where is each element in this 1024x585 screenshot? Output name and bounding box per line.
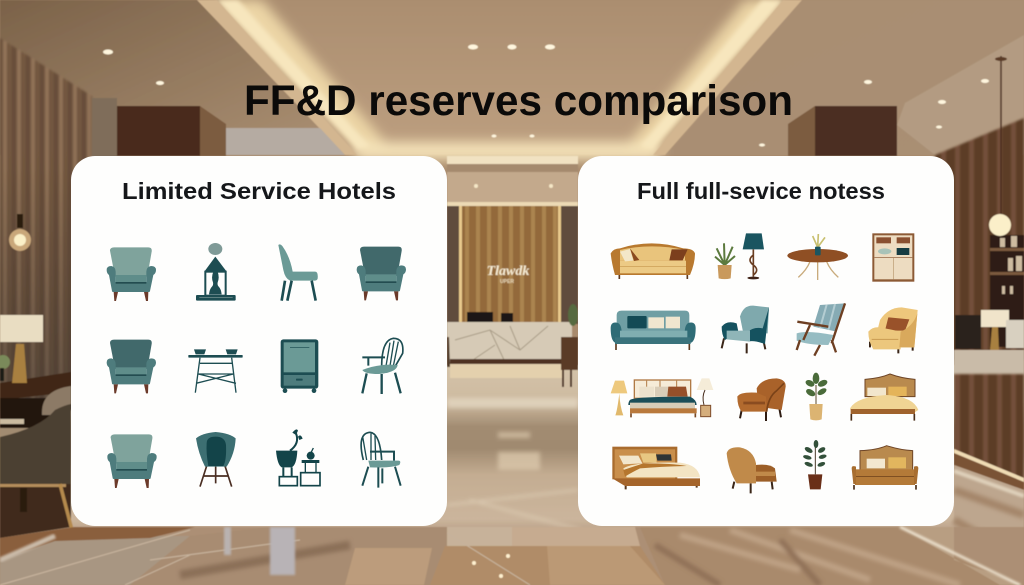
icon: armchair light	[107, 247, 156, 301]
reception back wall	[447, 206, 578, 324]
icon: wood frame chair	[797, 303, 845, 356]
panel: limited service hotels	[71, 156, 447, 526]
center ceiling	[213, 0, 785, 155]
icon: scoop chair	[196, 432, 236, 487]
center upper ceiling strip	[447, 156, 578, 164]
icon: potted plant tan	[805, 373, 828, 420]
icon: brown armchair	[737, 378, 786, 421]
icon: teal sofa	[611, 311, 696, 350]
right pendant	[1000, 56, 1002, 215]
icon: cabinet	[872, 233, 914, 282]
left armchair	[42, 386, 71, 415]
icon: tufted settee	[852, 446, 918, 490]
icon: bed with teal throw	[628, 380, 697, 417]
right slat wall	[935, 118, 1024, 360]
icon: tan armchair	[727, 447, 777, 493]
floor streaks	[447, 398, 580, 530]
icon: potted plant dark	[803, 440, 827, 489]
floor	[0, 365, 1024, 585]
reception desk	[447, 322, 572, 362]
icon: lantern lamp	[196, 243, 236, 301]
ceiling downlights	[103, 44, 989, 146]
icon: windsor chair right	[362, 338, 403, 394]
icon: armchair dark	[357, 247, 406, 300]
icon: floor lamp	[611, 381, 627, 415]
icon: side chair	[278, 244, 318, 301]
lounge chairs	[561, 337, 578, 370]
cove light	[215, 0, 785, 160]
heading: limited service: Limited Service Hotels	[122, 178, 396, 204]
right desk lamp	[981, 310, 1009, 327]
left wood column	[117, 106, 200, 156]
icon: console table	[188, 349, 243, 393]
icon: tufted bed	[850, 374, 918, 421]
icon: cabinet on wheels	[281, 339, 318, 393]
icon: teal shade lamp	[743, 233, 764, 279]
icon: round table	[787, 234, 848, 280]
icon: potted plant small	[715, 243, 735, 279]
right wood column	[815, 106, 897, 156]
left wall pale recess	[226, 128, 345, 155]
panel: full service hotels	[578, 156, 954, 526]
icon: armchair light row three	[107, 434, 157, 488]
left table and lamp	[0, 372, 71, 400]
icon: camelback sofa	[611, 243, 695, 279]
reception logo: Tlawdk	[487, 264, 529, 279]
floor bottom marble	[0, 527, 1024, 585]
left pendant	[17, 214, 23, 228]
icon: plant set	[276, 429, 320, 486]
icon: lamp and nightstand	[697, 378, 713, 417]
icon: windsor chair left	[361, 432, 401, 488]
left ceiling	[0, 0, 345, 155]
icon: yellow armchair	[868, 307, 918, 353]
reception logo: UPER	[500, 279, 514, 285]
title: FF&D reserves comparison	[244, 77, 793, 125]
icon grid: colourful furniture	[611, 233, 918, 493]
ceiling edge faces	[197, 0, 357, 155]
icon: wide wood bed	[612, 447, 700, 489]
left curtains	[0, 38, 92, 410]
right ceiling	[665, 0, 1024, 155]
icon: teal armchair	[722, 306, 769, 353]
right counter	[954, 350, 1024, 374]
icon: armchair dark row two	[107, 340, 156, 393]
icon grid: teal furniture	[107, 243, 406, 488]
right shelves	[990, 235, 1024, 347]
heading: full service: Full full-sevice notess	[637, 178, 885, 204]
